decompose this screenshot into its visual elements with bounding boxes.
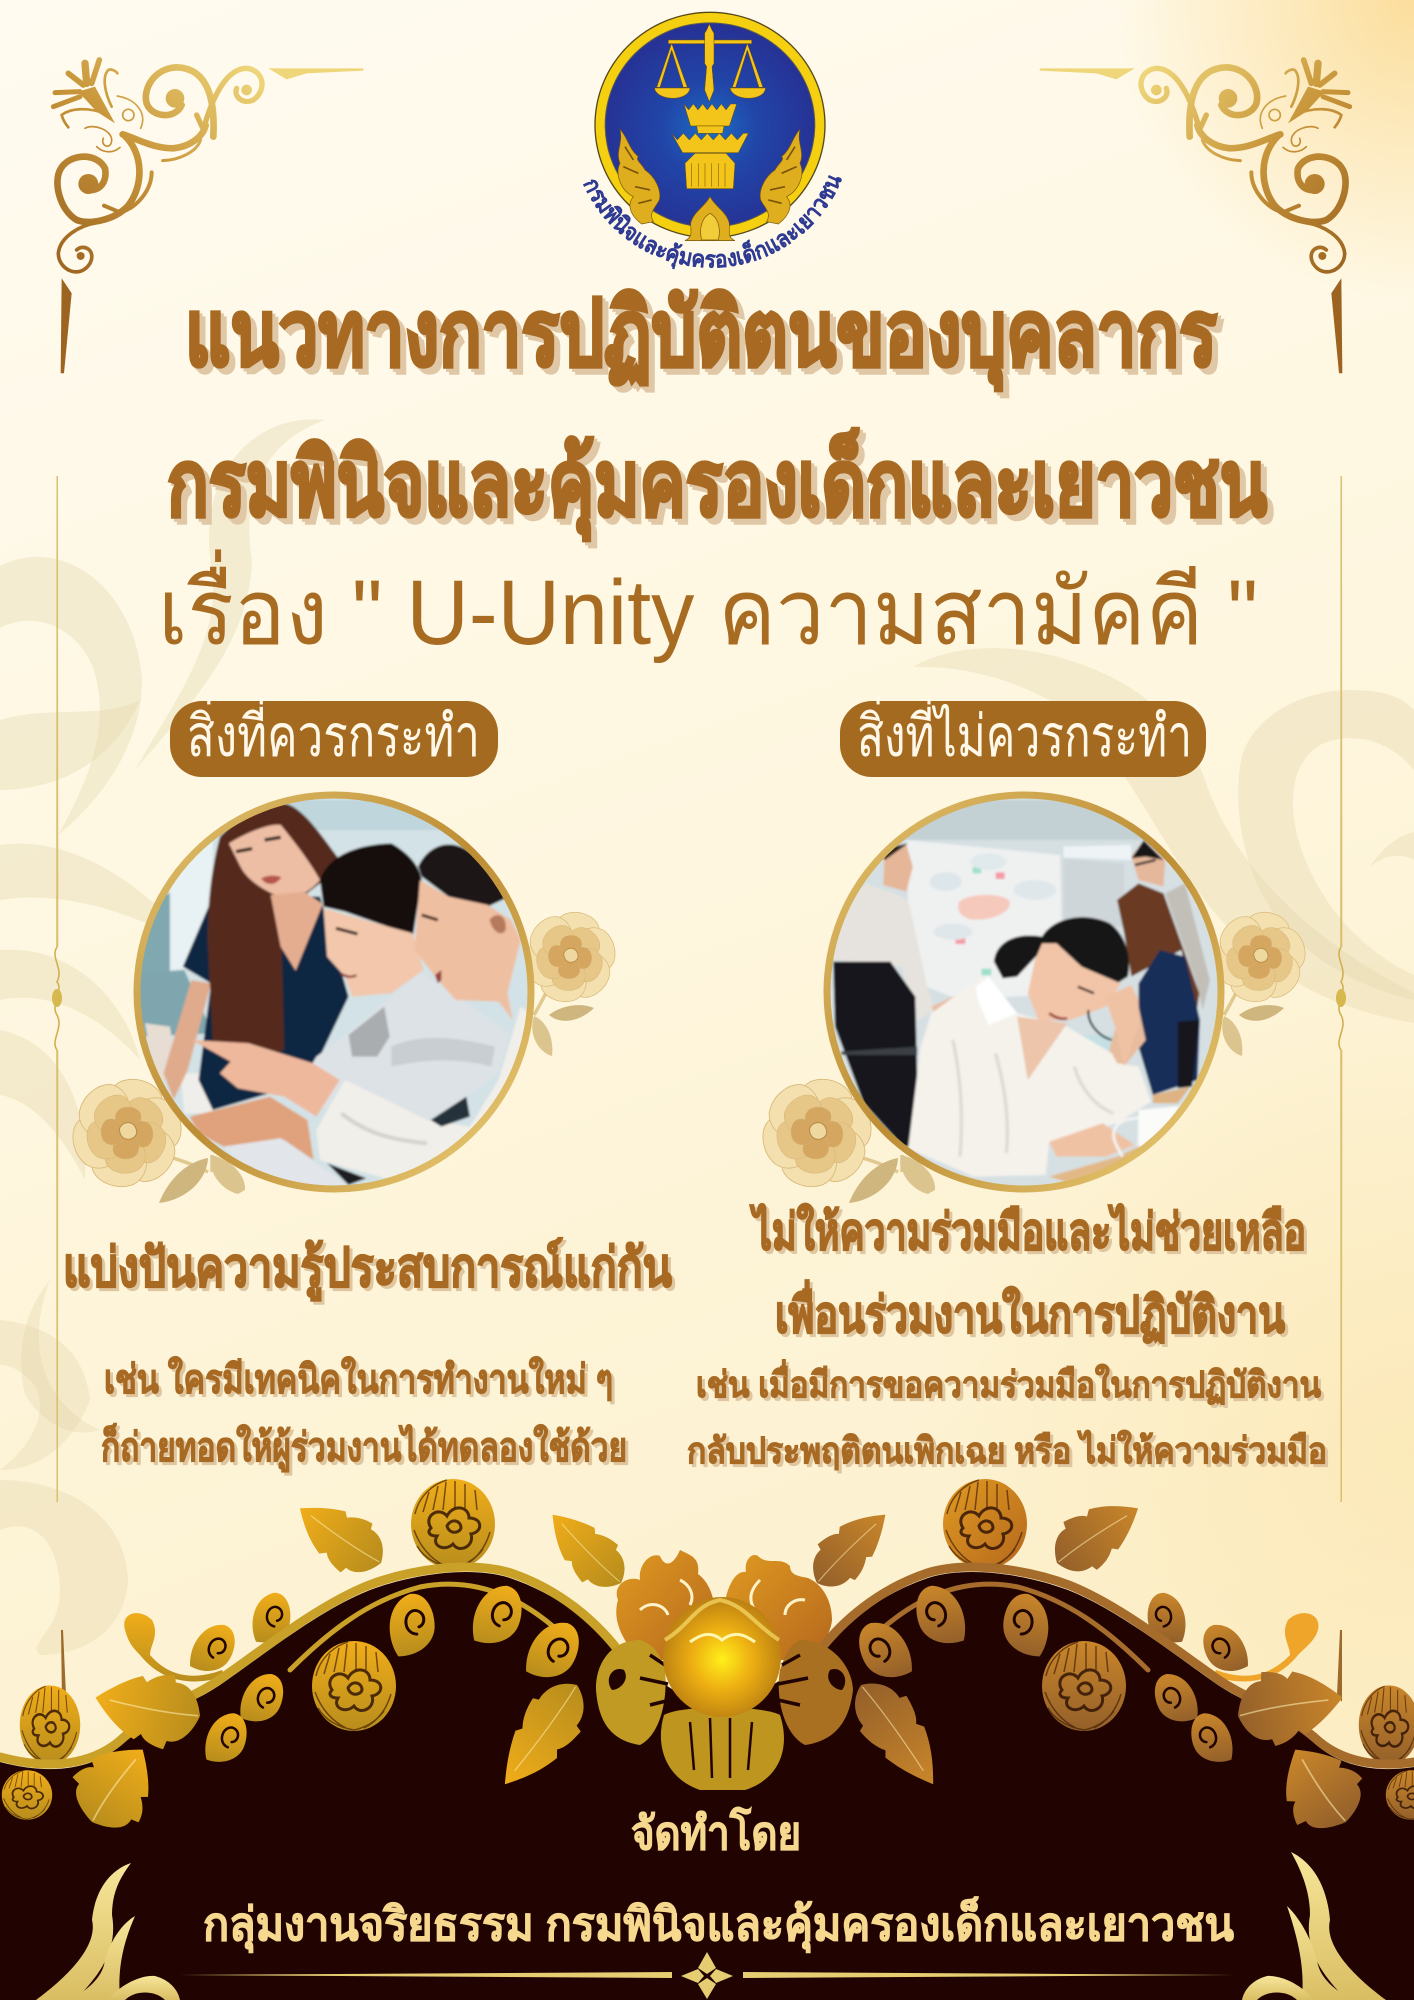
right heading: เพื่อนร่วมงานในการปฏิบัติงาน: [775, 1280, 1285, 1343]
logo ring and blue disc: [594, 12, 826, 238]
footer caption: organisation: กลุ่มงานจริยธรรม กรมพินิจและคุ้มครองเด็กและเยาวชน: [203, 1896, 1235, 1953]
right description: [687, 1359, 1327, 1471]
footer caption: prepared by: จัดทำโดย: [631, 1806, 801, 1859]
gold ribbon, right: [820, 1567, 1414, 1764]
dark scalloped shape, left half: [0, 1572, 722, 2000]
scrolls, lotus and leaves inside panel, right: [838, 1581, 1414, 1846]
logo scales and pedestal: [654, 24, 766, 189]
top leaves and lotus, left: [283, 1479, 639, 1602]
dark scalloped shape, right half: [716, 1572, 1414, 2000]
footer flourish: right: [1242, 1852, 1386, 2000]
left heading: แบ่งปันความรู้ประสบการณ์แก่กัน: [63, 1237, 672, 1301]
right description: กลับประพฤติตนเพิกเฉย หรือ ไม่ให้ความร่วมมือ: [687, 1429, 1327, 1471]
photo: colleagues sharing knowledge: [124, 790, 552, 1200]
frame spikes above footer: [61, 1630, 1342, 1702]
photo: stressed colleague working alone: [814, 790, 1242, 1200]
vine scrolls on cream, right: [1148, 1593, 1414, 1765]
logo curved department name: กรมพินิจและคุ้มครองเด็กและเยาวชน: [583, 175, 842, 270]
gold roses: right photo: [756, 909, 1311, 1203]
vine scrolls on cream, left: [20, 1593, 290, 1765]
frame: left vertical line: [52, 476, 62, 1502]
pill: things not to do: [840, 696, 1206, 777]
corner ornament: top right: [1040, 60, 1350, 373]
frame: right vertical line: [1336, 476, 1346, 1502]
left description: [101, 1356, 627, 1472]
central lotus flower: [596, 1597, 853, 1790]
gold roses: left photo: [66, 909, 621, 1203]
top leaves and lotus, right: [798, 1483, 1154, 1601]
watermark swirls: [0, 419, 1414, 1655]
right description: เช่น เมื่อมีการขอความร่วมมือในการปฏิบัติงาน: [696, 1359, 1321, 1405]
pill: things to do: สิ่งที่ควรกระทำ: [187, 696, 480, 769]
corner ornament: top left: [53, 60, 363, 373]
title line 3: topic: เรื่อง " U-Unity ความสามัคคี ": [158, 549, 1258, 664]
pill: things not to do: สิ่งที่ไม่ควรกระทำ: [857, 696, 1192, 769]
footer divider with diamond: [180, 1952, 1235, 1999]
right top lotus: [943, 1479, 1027, 1569]
footer flourish: left: [36, 1863, 180, 2000]
logo: juvenile department emblem: [583, 12, 842, 270]
scrolls, lotus and leaves inside panel, left: [2, 1581, 602, 1844]
pill: things to do: [170, 696, 498, 777]
right heading: [749, 1203, 1306, 1343]
left description: เช่น ใครมีเทคนิคในการทำงานใหม่ ๆ: [104, 1356, 613, 1402]
logo naga figures: [618, 129, 802, 241]
left description: ก็ถ่ายทอดให้ผู้ร่วมงานได้ทดลองใช้ด้วย: [101, 1422, 627, 1472]
floral ornament behind: centre crown: [616, 1550, 832, 1660]
gold ribbon, left: [0, 1567, 618, 1764]
footer: dark scalloped panel with gold floral ornaments: [0, 1479, 1414, 2000]
